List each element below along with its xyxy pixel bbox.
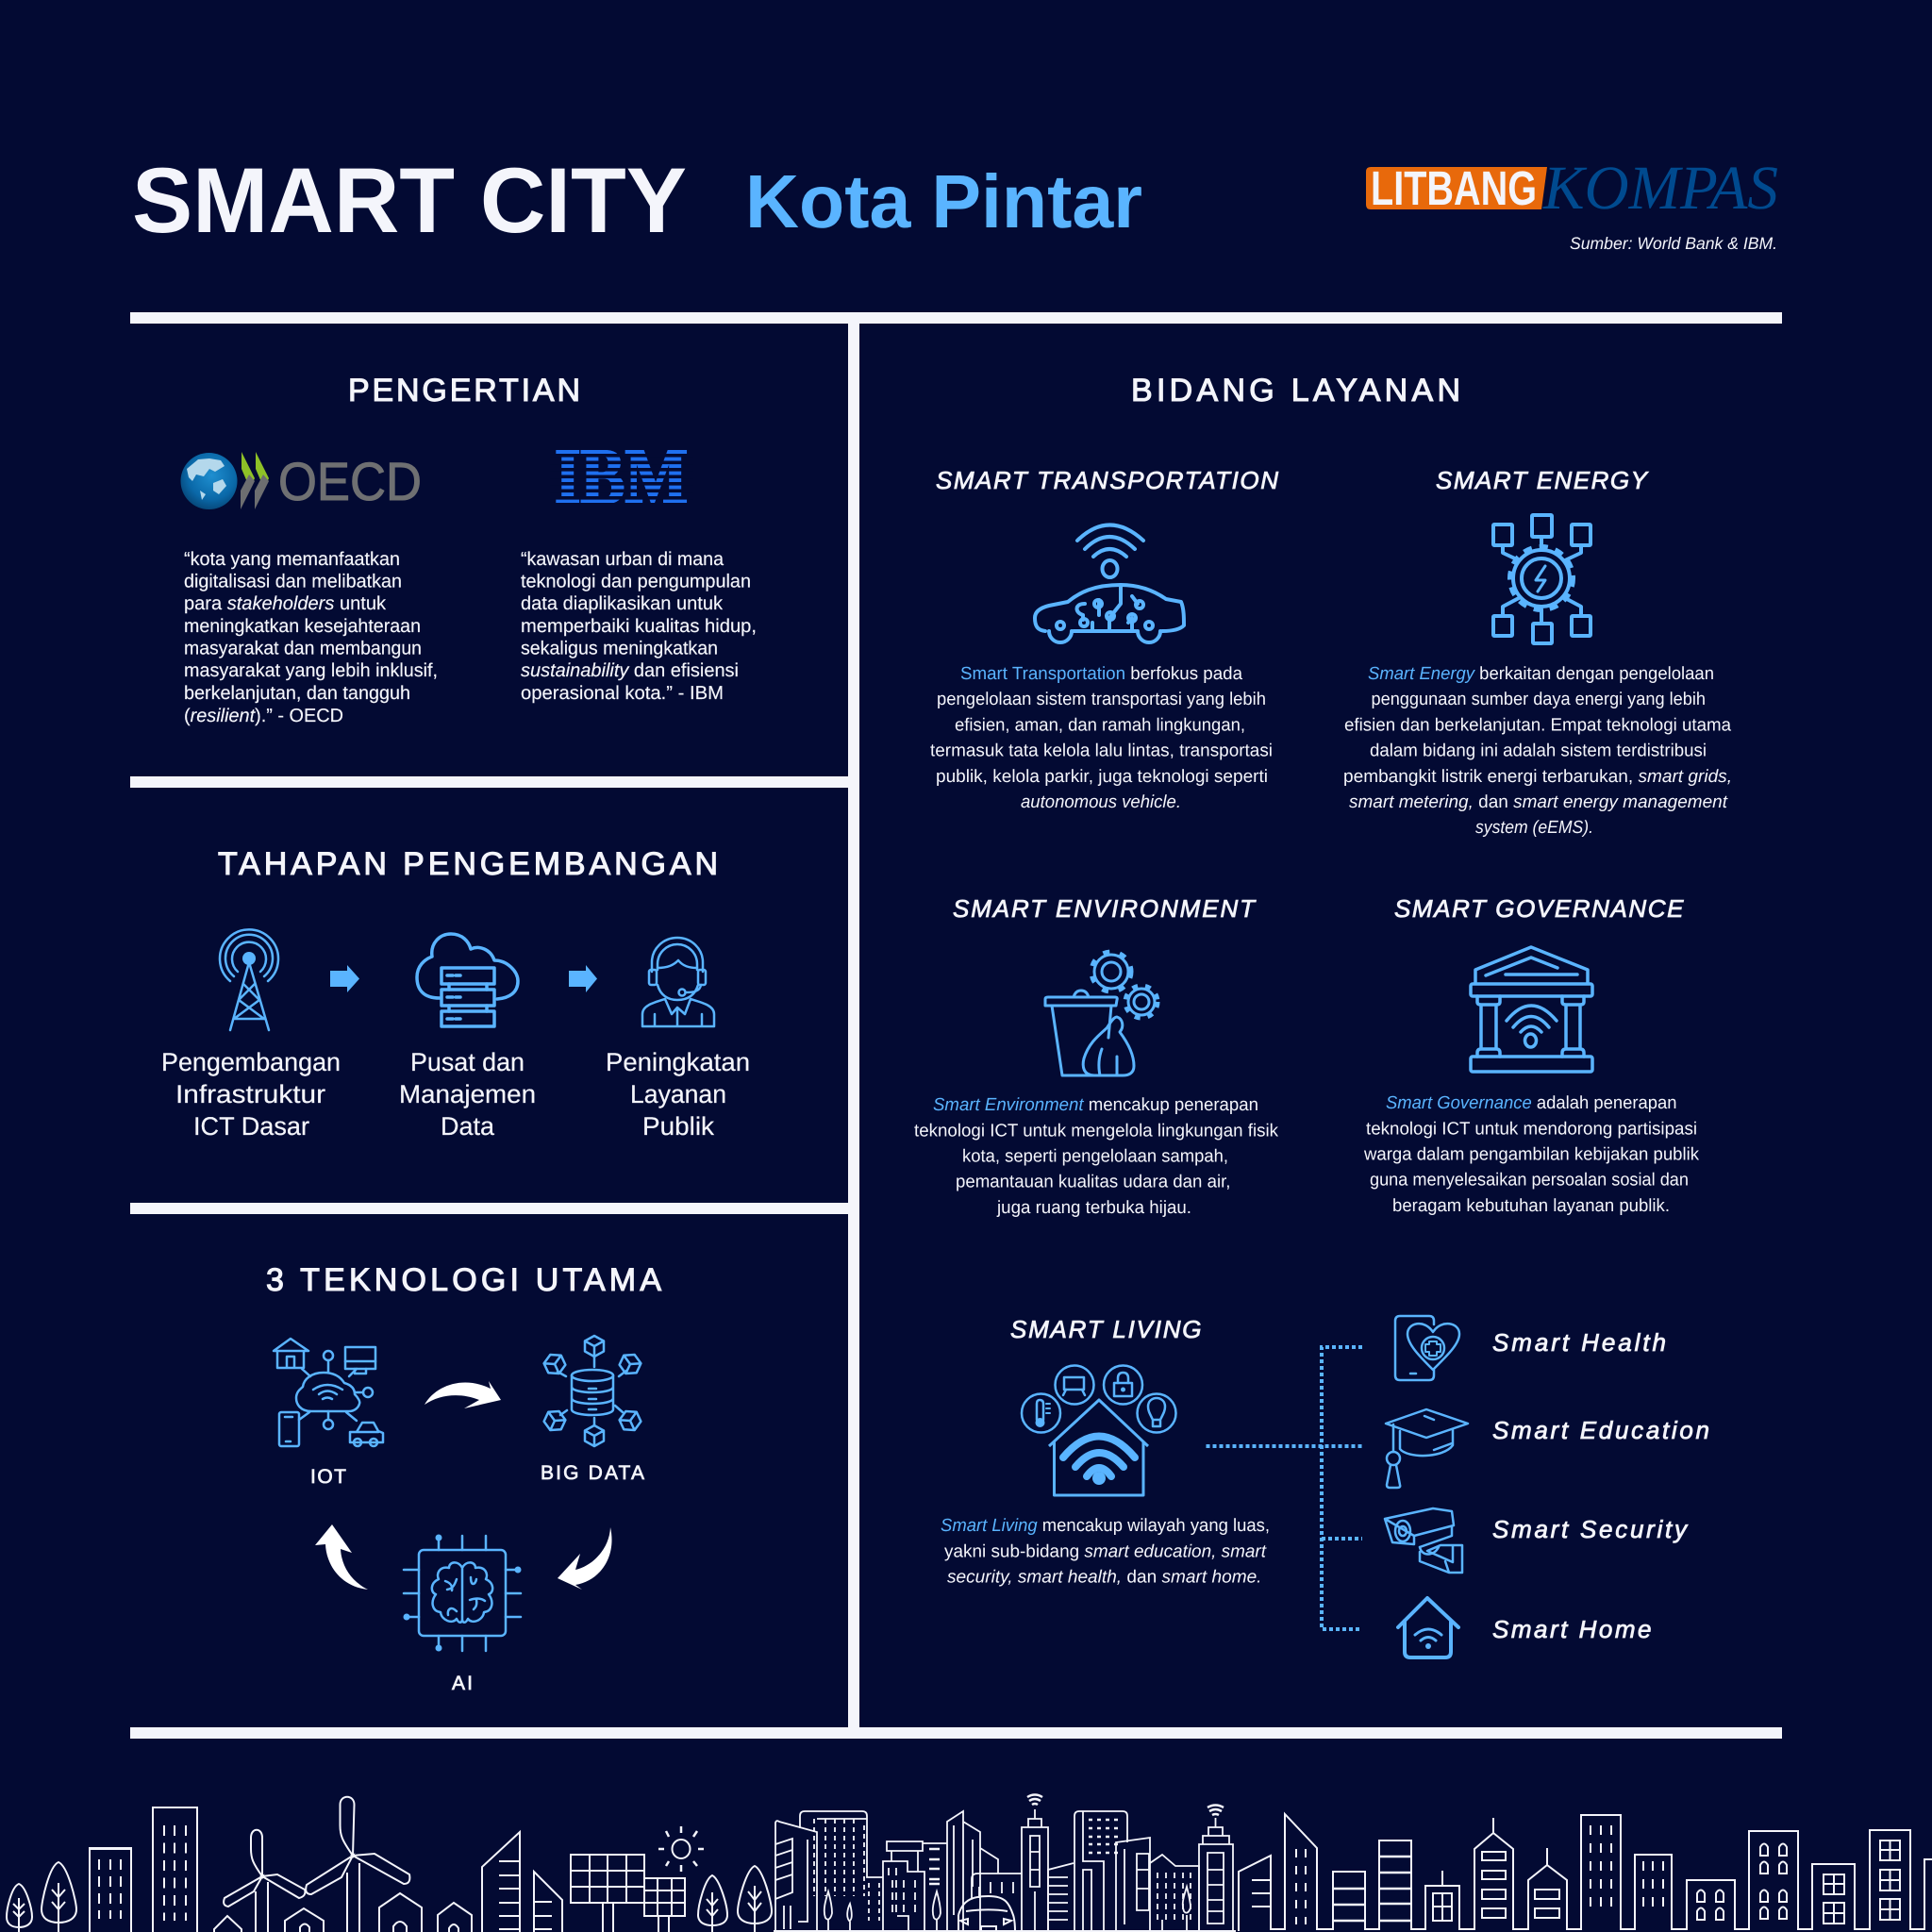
source note: Sumber: World Bank & IBM. [1570, 234, 1777, 253]
service: smart living [941, 1315, 1709, 1657]
illustration: city skyline [7, 1794, 1932, 1932]
text: smart environment [914, 1095, 1278, 1218]
icon: smart education [1386, 1409, 1468, 1488]
quote: IBM: “kawasan urban di mana [521, 549, 724, 570]
quote: OECD: digitalisasi dan melibatkan [184, 572, 402, 592]
label: BIG DATA: BIG DATA [541, 1462, 644, 1484]
text: smart energy: system (eEMS). [1475, 818, 1593, 838]
text: smart energy [1343, 664, 1732, 838]
heading: smart living: SMART LIVING [1010, 1315, 1202, 1343]
text: smart governance [1363, 1093, 1699, 1216]
quote: OECD [184, 549, 438, 726]
logo: Litbang Kompas: LITBANG [1371, 161, 1537, 215]
quote: OECD: masyarakat dan membangun [184, 638, 422, 658]
logo: OECD: OECD [278, 452, 422, 512]
panel: 3 teknologi utama [266, 1262, 661, 1694]
label: step 1: Pengembangan [161, 1048, 341, 1076]
small houses [214, 1893, 472, 1932]
label: smart security: Smart Security [1492, 1515, 1689, 1543]
text: smart energy: penggunaan sumber daya energi yang lebih [1372, 690, 1706, 709]
icon: connected car [1035, 525, 1184, 642]
quote: OECD: (resilient).” - OECD [184, 706, 343, 726]
panel: tahapan pengembangan [161, 846, 750, 1141]
heading: smart transportation: SMART TRANSPORTATION [936, 466, 1278, 494]
text: smart energy: dalam bidang ini adalah sistem terdistribusi [1370, 741, 1707, 760]
text: smart energy: Smart Energy berkaitan dengan pengelolaan [1368, 664, 1714, 684]
label: step 1: ICT Dasar [193, 1112, 309, 1141]
icon: smart house [1022, 1366, 1175, 1495]
label: step 3: Publik [642, 1112, 715, 1141]
icon: AI chip [404, 1534, 521, 1651]
text: smart environment: juga ruang terbuka hijau. [996, 1198, 1191, 1218]
icon: waste bin and gears [1045, 952, 1158, 1075]
solar panels and sun [571, 1855, 644, 1932]
label: IOT: IOT [310, 1466, 346, 1488]
text: smart governance: Smart Governance adalah penerapan [1386, 1093, 1677, 1113]
label: AI: AI [452, 1673, 473, 1694]
text: smart governance: warga dalam pengambilan kebijakan publik [1363, 1145, 1699, 1164]
car [958, 1896, 1015, 1932]
service: smart environment [914, 894, 1278, 1218]
label: step 1 [161, 1048, 341, 1141]
quote: IBM: teknologi dan pengumpulan [521, 572, 751, 592]
text: smart transportation: Smart Transportation berfokus pada [960, 664, 1242, 684]
text: smart energy: efisien dan berkelanjutan. Empat teknologi utama [1344, 715, 1731, 736]
icon: smart home [1398, 1598, 1458, 1657]
heading: tahapan pengembangan: TAHAPAN PENGEMBANGAN [218, 846, 718, 882]
icon: smart health [1395, 1316, 1459, 1380]
logo: Litbang Kompas [1366, 154, 1778, 223]
label: step 1: Infrastruktur [175, 1080, 325, 1108]
wedge buildings [482, 1832, 562, 1932]
icon: IoT [274, 1339, 383, 1446]
service: smart transportation [930, 466, 1278, 812]
icon: transmission tower [220, 929, 278, 1030]
text: smart governance: teknologi ICT untuk mendorong partisipasi [1366, 1119, 1697, 1140]
text: smart living [941, 1516, 1270, 1587]
quote: IBM: sekaligus meningkatkan [521, 638, 718, 658]
text: smart environment: teknologi ICT untuk mengelola lingkungan fisik [914, 1121, 1278, 1141]
label: step 2: Data [441, 1112, 495, 1141]
label: step 3: Peningkatan [606, 1048, 750, 1076]
text: smart transportation: publik, kelola parkir, juga teknologi seperti [936, 767, 1268, 787]
title: Smart City: SMART CITY [132, 148, 687, 252]
panel: bidang layanan [914, 373, 1732, 1657]
quote: OECD: para stakeholders untuk [184, 593, 387, 614]
text: smart transportation: efisien, aman, dan ramah lingkungan, [955, 715, 1245, 736]
arrow: step 1 to 2 [330, 965, 359, 992]
text: smart governance: guna menyelesaikan persoalan sosial dan [1370, 1170, 1689, 1191]
label: step 2: Pusat dan [410, 1048, 525, 1076]
text: smart transportation [930, 664, 1273, 812]
icon: energy network [1493, 515, 1591, 643]
quote: OECD: berkelanjutan, dan tangguh [184, 683, 410, 704]
service: smart governance [1363, 894, 1699, 1216]
quote: IBM: data diaplikasikan untuk [521, 593, 724, 614]
heading: smart environment: SMART ENVIRONMENT [953, 894, 1257, 923]
heading: pengertian: PENGERTIAN [348, 373, 580, 408]
icon: cloud server [417, 934, 518, 1026]
quote: IBM: memperbaiki kualitas hidup, [521, 616, 757, 637]
quote: IBM: operasional kota.” - IBM [521, 683, 724, 704]
label: step 3 [606, 1048, 750, 1141]
arrow: IoT to Big Data [425, 1381, 501, 1408]
quote: IBM [521, 549, 757, 704]
label: smart education: Smart Education [1492, 1416, 1709, 1444]
right skyline buildings [1239, 1814, 1932, 1931]
logo: OECD [181, 452, 422, 512]
quote: IBM: sustainability dan efisiensi [521, 660, 739, 681]
wind turbines [224, 1830, 305, 1932]
text: smart environment: pemantauan kualitas udara dan air, [956, 1172, 1230, 1192]
trees centre [698, 1875, 727, 1932]
text: smart living: Smart Living mencakup wilayah yang luas, [941, 1516, 1270, 1536]
logo: IBM: IBM [555, 433, 688, 521]
label: step 2 [399, 1048, 536, 1141]
heading: smart governance: SMART GOVERNANCE [1394, 894, 1684, 923]
text: smart environment: kota, seperti pengelolaan sampah, [962, 1147, 1228, 1166]
arrow: step 2 to 3 [569, 965, 597, 992]
text: smart transportation: pengelolaan sistem transportasi yang lebih [937, 690, 1266, 709]
quote: OECD: masyarakat yang lebih inklusif, [184, 660, 438, 681]
heading: smart energy: SMART ENERGY [1436, 466, 1649, 494]
label: smart health: Smart Health [1492, 1328, 1666, 1357]
quote: OECD: meningkatkan kesejahteraan [184, 616, 421, 637]
logo: Litbang Kompas: KOMPAS [1542, 154, 1778, 223]
layout frame bars [130, 312, 1782, 1739]
text: smart living: security, smart health, dan smart home. [947, 1568, 1262, 1587]
arrow: AI to IoT [315, 1524, 368, 1590]
text: smart living: yakni sub-bidang smart education, smart [944, 1541, 1267, 1562]
arrow: Big Data to AI [558, 1527, 612, 1590]
icon: smart security camera [1385, 1508, 1462, 1573]
panel: pengertian [181, 373, 757, 726]
service: smart energy [1343, 466, 1732, 838]
text: smart transportation: termasuk tata kelola lalu lintas, transportasi [930, 741, 1273, 760]
icon: customer service agent [642, 938, 714, 1026]
dotted connector [1206, 1347, 1362, 1629]
text: smart governance: beragam kebutuhan layanan publik. [1392, 1196, 1670, 1216]
text: smart transportation: autonomous vehicle. [1021, 792, 1181, 812]
text: smart energy: smart metering, dan smart energy management [1349, 792, 1728, 812]
trees and low rise left [7, 1884, 32, 1932]
heading: 3 teknologi utama: 3 TEKNOLOGI UTAMA [266, 1262, 661, 1298]
heading: bidang layanan: BIDANG LAYANAN [1131, 373, 1460, 408]
downtown cluster [774, 1930, 1236, 1932]
label: step 2: Manajemen [399, 1080, 536, 1108]
text: smart energy: pembangkit listrik energi terbarukan, smart grids, [1343, 767, 1732, 787]
label: step 3: Layanan [630, 1080, 726, 1108]
text: smart environment: Smart Environment mencakup penerapan [933, 1095, 1258, 1115]
quote: OECD: “kota yang memanfaatkan [184, 549, 400, 570]
subtitle: Kota Pintar: Kota Pintar [745, 159, 1142, 243]
icon: Big Data [541, 1336, 643, 1446]
label: smart home: Smart Home [1492, 1615, 1651, 1643]
icon: government building with wifi [1471, 947, 1592, 1072]
